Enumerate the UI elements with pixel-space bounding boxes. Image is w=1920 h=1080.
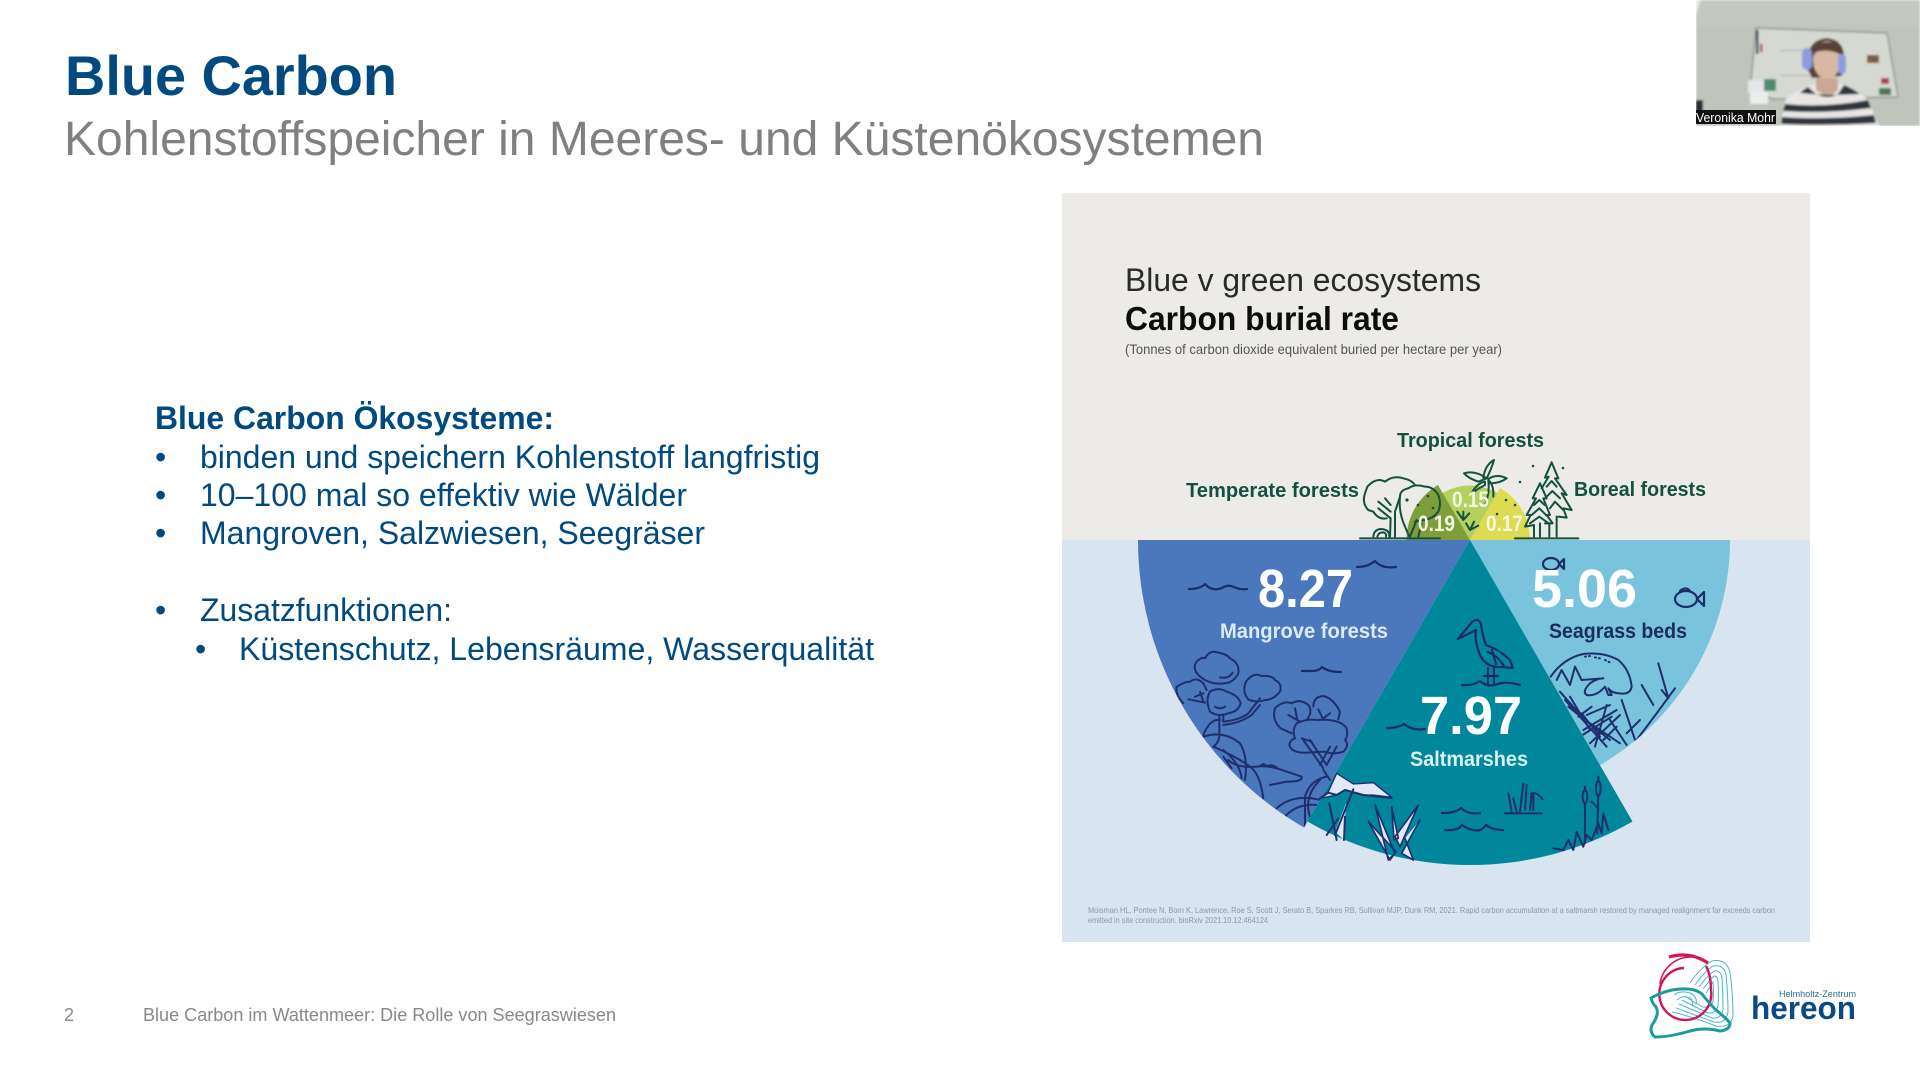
- icon: temperate trees: [1360, 477, 1440, 538]
- label: tropical forests: Tropical forests: [1397, 430, 1544, 452]
- logo: hereon: hereon: [1751, 990, 1856, 1026]
- text block: Blue Carbon ecosystems: Zusatzfunktionen:: [200, 592, 452, 628]
- icon: waves: [1189, 561, 1520, 830]
- text block: Blue Carbon ecosystems: •: [155, 477, 166, 513]
- icon: logo mark: [1651, 955, 1733, 1037]
- panel: infographic carbon burial rate: [1062, 193, 1810, 942]
- text block: Blue Carbon ecosystems: •: [155, 515, 166, 551]
- values: blue ecosystems: 8.27: [1258, 559, 1353, 619]
- values: blue ecosystems: 5.06: [1532, 559, 1637, 619]
- logo: hereon: [1651, 955, 1856, 1037]
- panel heading: Blue v green ecosystems: [1125, 262, 1481, 298]
- footer page number: 2: [64, 1005, 74, 1025]
- text block: Blue Carbon ecosystems: •: [155, 592, 166, 628]
- whiteboard: [1750, 28, 1898, 99]
- icon: palm tree: [1457, 460, 1507, 530]
- values: green forests: 0.19: [1418, 511, 1455, 536]
- footer text: Blue Carbon im Wattenmeer: Die Rolle von Seegraswiesen: [143, 1005, 616, 1025]
- chart: saltmarsh sector: [1308, 540, 1632, 865]
- text block: Blue Carbon ecosystems: 10–100 mal so effektiv wie Wälder: [200, 477, 687, 513]
- text block: Blue Carbon ecosystems: Mangroven, Salzwiesen, Seegräser: [200, 515, 705, 551]
- label: boreal forests: Boreal forests: [1574, 479, 1706, 501]
- label: mangrove forests: Mangrove forests: [1220, 620, 1388, 643]
- icon: wading bird: [1458, 620, 1513, 683]
- panel heading: [1125, 262, 1502, 357]
- values: green forests: 0.17: [1486, 511, 1523, 536]
- text block: Blue Carbon ecosystems: Küstenschutz, Lebensräume, Wasserqualität: [239, 631, 874, 667]
- icon: fish large: [1675, 588, 1704, 607]
- citation: Moisman HL, Pontee N, Born K, Lawrence, Roe S, Scott J, Serato B, Sparkes RB, Sullivan MJP, Dunk RM, 2021. Rapid carbon accumulation at a saltmarsh restored by managed realignment far exceeds carbon: [1088, 905, 1775, 915]
- label: saltmarshes: Saltmarshes: [1410, 748, 1528, 771]
- icon: white bird shape: [1320, 773, 1392, 798]
- chart: seagrass sector: [1470, 540, 1730, 765]
- label: temperate forests: Temperate forests: [1186, 480, 1359, 502]
- values: green forests: 0.15: [1452, 487, 1489, 512]
- values: blue ecosystems: 7.97: [1420, 686, 1522, 746]
- citation: emitted in site construction. bioRxiv 2021.10.12.464124: [1088, 915, 1268, 925]
- text block: Blue Carbon ecosystems: •: [195, 631, 206, 667]
- subtitle: Kohlenstoffspeicher in Meeres- und Küstenökosystemen: [64, 113, 1264, 166]
- chart: mangrove sector: [1138, 540, 1470, 828]
- icon: fish small: [1543, 558, 1564, 570]
- icon: mangrove trees: [1176, 652, 1347, 827]
- text block: Blue Carbon ecosystems: binden und speichern Kohlenstoff langfristig: [200, 439, 820, 475]
- citation: [1088, 905, 1775, 925]
- small dots: [1405, 465, 1564, 515]
- panel heading: (Tonnes of carbon dioxide equivalent buried per hectare per year): [1125, 341, 1502, 357]
- label: seagrass beds: Seagrass beds: [1549, 620, 1687, 643]
- icon: seagrass blades and manatee: [1551, 653, 1675, 747]
- text block: Blue Carbon ecosystems: Blue Carbon Ökosysteme:: [155, 400, 554, 436]
- chart: green ecosystems semicircle: [1406, 485, 1530, 540]
- icon: boreal trees: [1515, 462, 1578, 538]
- text block: Blue Carbon ecosystems: [155, 400, 874, 667]
- icon: saltmarsh grasses: [1327, 777, 1608, 860]
- values: blue ecosystems: [1258, 559, 1637, 746]
- webcam name tag: Veronika Mohr: [1696, 110, 1776, 125]
- text block: Blue Carbon ecosystems: •: [155, 439, 166, 475]
- panel heading: Carbon burial rate: [1125, 300, 1399, 337]
- webcam video: [1696, 0, 1920, 126]
- person: [1807, 38, 1844, 78]
- logo text: Helmholtz-Zentrum: [1779, 989, 1856, 1000]
- title: Blue Carbon: [65, 44, 397, 107]
- values: green forests: [1418, 487, 1523, 536]
